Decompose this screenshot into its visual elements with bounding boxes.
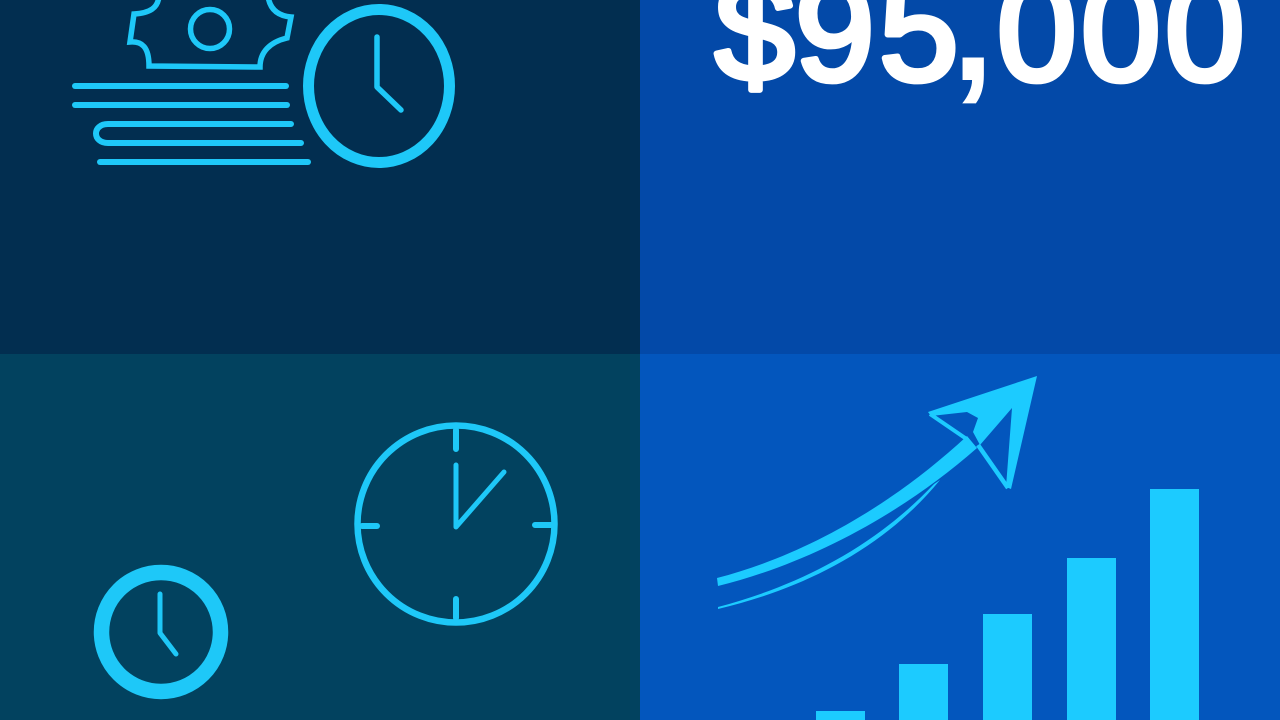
- icon: large clock: [308, 10, 450, 162]
- panel: salary figure: [640, 0, 1280, 354]
- arrow: upward trend: [717, 376, 1037, 609]
- icon: small clock: [102, 572, 220, 692]
- panel: clocks: [0, 354, 640, 720]
- icon: speed lines: [75, 86, 308, 162]
- bar chart: [816, 489, 1199, 720]
- icon: wall clock: [358, 426, 554, 622]
- panel: growth chart: [640, 354, 1280, 720]
- icon: banknote: [130, 0, 291, 67]
- panel: money and time: [0, 0, 640, 354]
